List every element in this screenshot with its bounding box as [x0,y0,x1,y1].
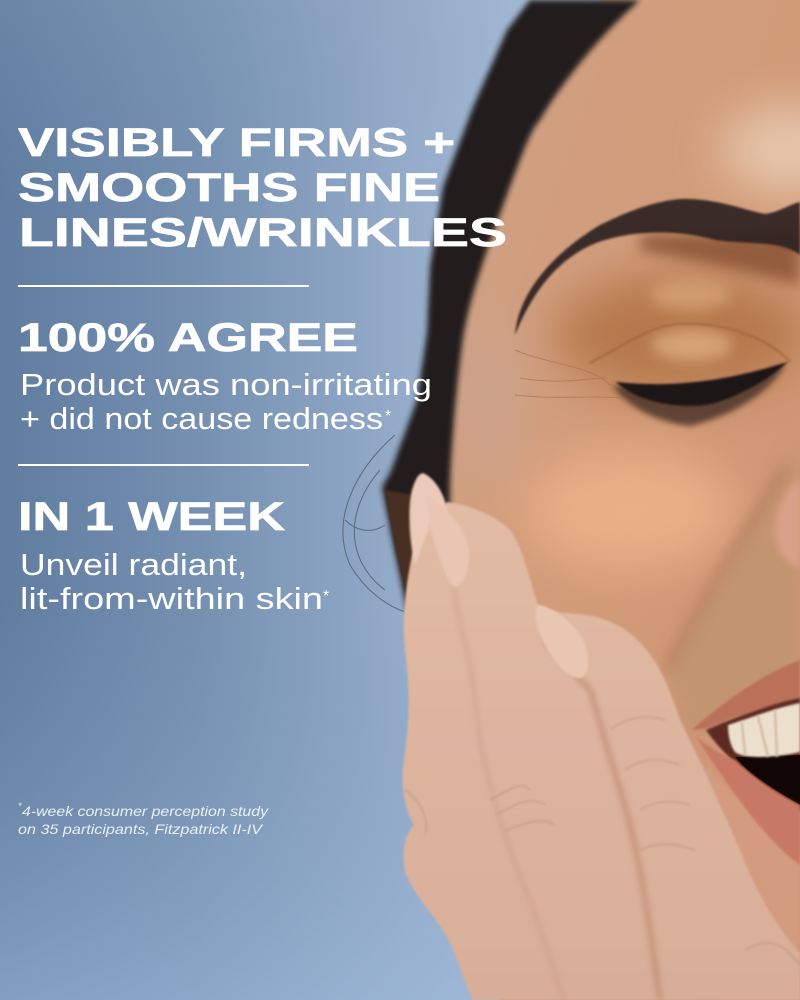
flyaway hairs [343,435,405,612]
eye wrinkles [515,350,620,398]
stat: 100% agree [18,316,432,436]
stat: in 1 week: lit-from-within skin [20,581,323,616]
photo: woman's face and hand [343,0,800,1000]
hair [382,0,640,610]
cheek highlight [525,450,735,570]
stat: 100% agree: * [385,408,391,425]
hair brown ends [385,490,420,600]
chin below lip [700,760,800,1000]
eye socket shading [555,275,800,395]
fingernail: index [409,473,447,565]
knuckle creases [405,717,695,850]
nasolabial crease [667,468,786,668]
upper lip [692,660,800,730]
hand silhouette [403,502,800,1000]
heading [18,121,507,255]
stat: in 1 week: IN 1 WEEK [18,495,285,539]
eyelashes [616,362,788,406]
eyebrow [515,199,800,335]
face skin [440,0,800,1000]
hand [403,473,800,1000]
mouth interior [706,698,800,812]
stat: in 1 week [18,495,329,616]
stat: 100% agree: Product was non-irritating [20,367,432,402]
index-middle finger gap [453,587,563,1000]
heading: VISIBLY FIRMS + [18,121,455,165]
stat: in 1 week: Unveil radiant, [20,547,247,582]
stat: 100% agree: + did not cause redness [20,401,383,436]
fingernail: middle [428,495,469,586]
tooth gaps [742,710,777,757]
footnote [18,801,269,837]
temple shading [460,310,520,490]
forehead highlight [720,105,800,195]
eyebrow shadow [640,225,800,285]
fingernail: ring [536,605,588,678]
heading: LINES/WRINKLES [19,211,507,255]
footnote: 4-week consumer perception study [22,803,269,819]
footnote: * [18,801,22,811]
lower lip [695,735,800,865]
upper-lip area [665,455,800,735]
eyelid highlight [652,329,732,361]
lower lash shadow [612,365,785,426]
brow-bone highlight [650,279,730,311]
heading: SMOOTHS FINE [18,166,440,210]
eyelid crease [590,324,790,363]
dark mouth [735,755,800,805]
nose [776,478,800,568]
stat: 100% agree: 100% AGREE [18,316,358,360]
middle-ring finger shadow [545,640,660,1000]
divider [18,464,309,466]
teeth [728,703,800,757]
stat: in 1 week: * [323,588,329,605]
divider [18,285,309,287]
footnote: on 35 participants, Fitzpatrick II-IV [18,821,264,837]
finger knuckle at bottom right [745,943,800,965]
